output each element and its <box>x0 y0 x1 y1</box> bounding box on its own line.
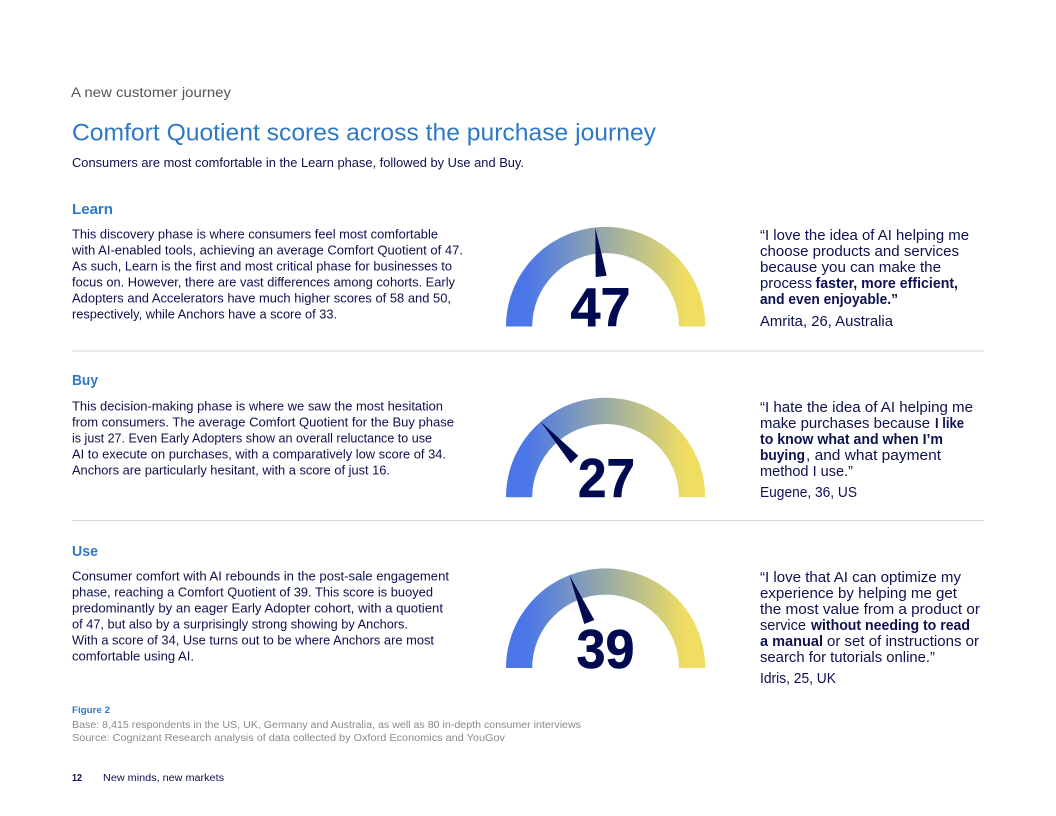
figure notes: Base: 8,415 respondents in the US, UK, Germany and Australia, as well as 80 in-depth consumer interviews <box>72 720 581 731</box>
panel: Use <box>72 544 980 687</box>
text block: Buy description: is just 27. Even Early Adopters show an overall reluctance to use <box>72 432 432 446</box>
quote: Eugene: “I hate the idea of AI helping me <box>760 400 973 416</box>
quote: Idris: service <box>760 618 806 634</box>
quote: Idris <box>760 570 980 687</box>
quote: Amrita: Amrita, 26, Australia <box>760 314 894 330</box>
text block: Buy description <box>72 400 454 478</box>
quote: Amrita <box>760 228 969 330</box>
quote: Idris: without needing to read <box>810 618 970 634</box>
subtitle: Consumers are most comfortable in the Learn phase, followed by Use and Buy. <box>72 156 524 170</box>
quote: Amrita: because you can make the <box>760 260 941 276</box>
quote: Idris: Idris, 25, UK <box>760 671 836 687</box>
figure notes: Figure 2 <box>72 705 110 716</box>
quote: Eugene: , and what payment <box>806 448 941 464</box>
quote: Idris: a manual <box>760 634 823 650</box>
heading: Use: Use <box>72 544 98 560</box>
quote: Eugene: method I use.” <box>760 464 853 480</box>
heading: Learn: Learn <box>72 202 113 218</box>
text block: Learn description: As such, Learn is the first and most critical phase for businesses to <box>72 260 452 274</box>
footer: 12 <box>72 773 82 784</box>
figure notes <box>72 705 581 744</box>
quote: Idris: “I love that AI can optimize my <box>760 570 962 586</box>
quote: Eugene: to know what and when I’m <box>760 432 943 448</box>
section label: A new customer journey <box>71 84 231 100</box>
text block: Buy description: Anchors are particularly hesitant, with a score of just 16. <box>72 464 390 478</box>
text block: Use description: With a score of 34, Use turns out to be where Anchors are most <box>72 634 435 648</box>
quote: Eugene: I like <box>935 416 964 432</box>
text block: Learn description: focus on. However, there are vast differences among cohorts. Early <box>72 276 456 290</box>
gauge: Buy score 27: 27 <box>578 448 635 509</box>
text block: Use description: of 47, but also by a surprisingly strong showing by Anchors. <box>72 618 408 632</box>
panel: Buy <box>72 373 973 509</box>
text block: Learn description: This discovery phase is where consumers feel most comfortable <box>72 228 438 242</box>
quote: Amrita: choose products and services <box>760 244 959 260</box>
heading: Buy: Buy <box>72 373 98 389</box>
title: Comfort Quotient scores across the purchase journey <box>72 120 656 146</box>
quote: Eugene: Eugene, 36, US <box>760 485 857 501</box>
quote: Amrita: process <box>760 276 812 292</box>
text block: Learn description: Adopters and Accelerators have much higher scores of 58 and 50, <box>72 292 451 306</box>
quote: Eugene: buying <box>760 448 805 464</box>
quote: Idris: search for tutorials online.” <box>760 650 935 666</box>
quote: Eugene: make purchases because <box>760 416 930 432</box>
text block: Use description: comfortable using AI. <box>72 650 194 664</box>
text block: Learn description: respectively, while Anchors have a score of 33. <box>72 308 337 322</box>
gauge: Use score 39 <box>506 568 705 680</box>
text block: Buy description: AI to execute on purchases, with a comparatively low score of 34. <box>72 448 446 462</box>
text block: Buy description: from consumers. The average Comfort Quotient for the Buy phase <box>72 416 454 430</box>
footer: New minds, new markets <box>103 773 224 784</box>
text block: Use description: Consumer comfort with AI rebounds in the post-sale engagement <box>72 570 450 584</box>
text block: Learn description: with AI-enabled tools, achieving an average Comfort Quotient of 47. <box>71 244 463 258</box>
text block: Buy description: This decision-making phase is where we saw the most hesitation <box>72 400 443 414</box>
gauge: Buy score 27 <box>506 398 705 509</box>
text block: Learn description <box>71 228 463 322</box>
gauge: Learn score 47: 47 <box>570 277 630 338</box>
panel: Learn <box>71 202 969 338</box>
gauge: Learn score 47 <box>506 227 705 338</box>
text block: Use description: phase, reaching a Comfort Quotient of 39. This score is buoyed <box>72 586 433 600</box>
quote: Idris: or set of instructions or <box>827 634 979 650</box>
figure notes: Source: Cognizant Research analysis of data collected by Oxford Economics and YouGov <box>72 733 505 744</box>
text block: Use description <box>72 570 450 664</box>
text block: Use description: predominantly by an eager Early Adopter cohort, with a quotient <box>72 602 444 616</box>
quote: Idris: experience by helping me get <box>760 586 957 602</box>
quote: Amrita: “I love the idea of AI helping me <box>760 228 969 244</box>
quote: Amrita: and even enjoyable.” <box>760 292 898 308</box>
quote: Eugene <box>760 400 973 501</box>
quote: Amrita: faster, more efficient, <box>816 276 958 292</box>
gauge: Use score 39: 39 <box>576 619 634 680</box>
quote: Idris: the most value from a product or <box>760 602 980 618</box>
